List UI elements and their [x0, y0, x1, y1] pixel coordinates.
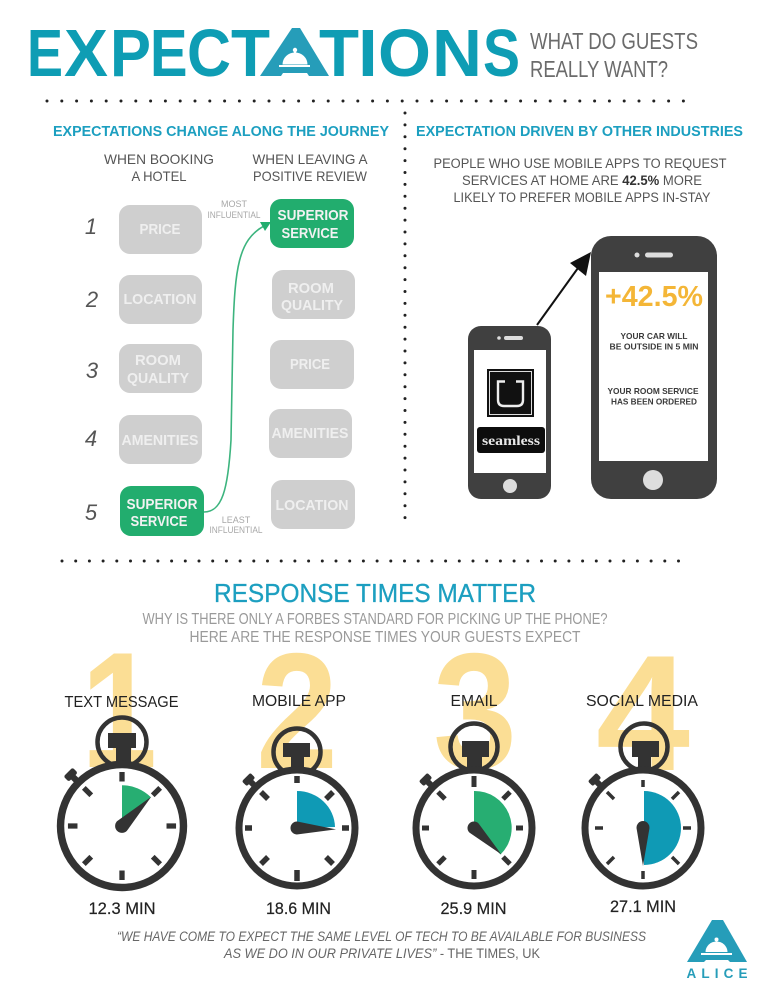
quote: “WE HAVE COME TO EXPECT THE SAME LEVEL OF TECH TO BE AVAILABLE FOR BUSINESS: [117, 929, 646, 944]
value: 12.3 min: 12.3 MIN: [88, 900, 156, 918]
right column: ranking boxes: SUPERIOR: [278, 207, 349, 224]
title: C: [187, 16, 231, 91]
left column: ranking boxes: ROOM: [135, 352, 181, 369]
title: E: [150, 16, 188, 91]
title: S: [483, 16, 520, 91]
label: least influential: LEAST: [222, 515, 251, 525]
icon: stopwatch face at 18.6 minutes: [239, 770, 355, 886]
panel: expectation driven by other industries: [416, 124, 743, 499]
panel: expectations change along the journey: [53, 124, 389, 536]
panel: email timer: [416, 693, 532, 918]
right column: ranking boxes: QUALITY: [281, 297, 343, 314]
text block: mobile apps statistic: PEOPLE WHO USE MOBILE APPS TO REQUEST: [434, 156, 726, 171]
label: least influential: [210, 515, 262, 535]
column heading: when leaving a review: POSITIVE REVIEW: [253, 168, 368, 184]
label: text message: TEXT MESSAGE: [64, 694, 178, 711]
label: email: EMAIL: [450, 693, 498, 710]
column heading: when booking: WHEN BOOKING: [104, 151, 214, 167]
icon: stopwatch face at 25.9 minutes: [416, 770, 532, 886]
right column: ranking boxes: PRICE: [290, 356, 330, 373]
large rank numerals: 4: [596, 621, 690, 805]
logo: alice: ALICE: [686, 966, 748, 981]
title: [27, 16, 520, 91]
icon: stopwatch crown: [450, 724, 498, 770]
text block: response times intro: [142, 611, 608, 646]
right column: ranking boxes: AMENITIES: [272, 425, 348, 442]
arrow: superior service rises: [204, 222, 271, 512]
column heading: when leaving a review: [252, 151, 368, 184]
text block: phone messages: YOUR ROOM SERVICE: [608, 386, 699, 396]
panel: social media timer: [585, 693, 701, 916]
text block: response times intro: HERE ARE THE RESPONSE TIMES YOUR GUESTS EXPECT: [190, 629, 581, 646]
rank numbers: 2: [85, 287, 98, 312]
right column: ranking boxes: ROOM: [288, 280, 334, 297]
subtitle: REALLY WANT?: [530, 56, 668, 82]
arrow: small phone to large phone: [537, 252, 591, 325]
rank numbers: 1: [85, 214, 97, 239]
right column: ranking boxes: [269, 199, 355, 529]
title: T: [231, 16, 270, 91]
title: O: [378, 16, 431, 91]
text block: mobile apps statistic: LIKELY TO PREFER MOBILE APPS IN-STAY: [454, 190, 710, 205]
value: 27.1 min: 27.1 MIN: [610, 898, 676, 916]
icon: large phone: [591, 236, 717, 499]
title: X: [64, 16, 108, 91]
icon: stopwatch face at 27.1 minutes: [585, 770, 701, 886]
left column: ranking boxes: QUALITY: [127, 370, 189, 387]
label: most influential: INFLUENTIAL: [208, 210, 260, 220]
left column: ranking boxes: SERVICE: [130, 513, 188, 530]
icon: stopwatch crown: [620, 724, 668, 770]
right column: ranking boxes: LOCATION: [276, 497, 348, 514]
left column: ranking boxes: [119, 205, 204, 536]
rank numbers: 5: [85, 500, 98, 525]
icon: stopwatch crown: [274, 728, 320, 776]
stat: plus 42.5 percent: +42.5%: [605, 281, 703, 313]
value: 25.9 min: 25.9 MIN: [440, 900, 506, 918]
value: 18.6 min: 18.6 MIN: [266, 900, 331, 918]
label: most influential: [208, 199, 260, 220]
heading: response times matter: RESPONSE TIMES MATTER: [214, 580, 536, 608]
text block: phone messages: [608, 331, 699, 406]
rank numbers: 4: [85, 426, 97, 451]
left column: ranking boxes: LOCATION: [124, 291, 196, 308]
title: P: [110, 16, 151, 91]
large rank numerals: 1: [81, 618, 157, 802]
right column: ranking boxes: SERVICE: [282, 225, 338, 242]
text block: phone messages: BE OUTSIDE IN 5 MIN: [610, 342, 698, 352]
heading: other industries: EXPECTATION DRIVEN BY OTHER INDUSTRIES: [416, 124, 743, 140]
text block: phone messages: HAS BEEN ORDERED: [611, 396, 697, 406]
quote: AS WE DO IN OUR PRIVATE LIVES” - THE TIMES, UK: [223, 946, 540, 961]
label: mobile app: MOBILE APP: [252, 693, 346, 710]
rank numbers: [85, 214, 99, 525]
heading: journey: EXPECTATIONS CHANGE ALONG THE JOURNEY: [53, 124, 389, 140]
text block: response times intro: WHY IS THERE ONLY A FORBES STANDARD FOR PICKING UP THE PHONE?: [142, 611, 608, 628]
large rank numerals: [81, 618, 690, 805]
title: T: [319, 16, 359, 91]
icon: stopwatch crown: [98, 718, 146, 766]
left column: ranking boxes: AMENITIES: [122, 432, 198, 449]
label: most influential: MOST: [221, 199, 248, 209]
text block: phone messages: YOUR CAR WILL: [620, 331, 688, 341]
title: E: [27, 16, 63, 91]
column heading: when booking: A HOTEL: [132, 168, 187, 184]
subtitle: [530, 28, 698, 82]
icon: stopwatch face at 12.3 minutes: [61, 765, 183, 887]
icon: seamless logo: seamless: [482, 434, 541, 449]
panel: text message timer: [61, 694, 183, 918]
large rank numerals: 3: [433, 619, 517, 803]
label: least influential: INFLUENTIAL: [210, 525, 262, 535]
logo: alice: [686, 920, 748, 981]
title: N: [432, 16, 482, 91]
text block: mobile apps statistic: [434, 156, 726, 205]
quote: [117, 929, 646, 961]
icon: small phone: [468, 326, 551, 499]
title: I: [358, 16, 378, 91]
text block: mobile apps statistic: SERVICES AT HOME ARE 42.5% MORE: [462, 173, 702, 188]
icon: seamless logo: [477, 427, 545, 453]
left column: ranking boxes: PRICE: [140, 221, 180, 238]
large rank numerals: 2: [256, 619, 338, 803]
column heading: when leaving a review: WHEN LEAVING A: [252, 151, 368, 167]
subtitle: WHAT DO GUESTS: [530, 28, 698, 54]
left column: ranking boxes: SUPERIOR: [126, 496, 198, 513]
column heading: when booking: [104, 151, 214, 184]
panel: mobile app timer: [239, 693, 355, 918]
label: social media: SOCIAL MEDIA: [586, 693, 698, 710]
icon: title letter A with bell: [260, 28, 329, 76]
icon: uber logo: [487, 369, 534, 417]
rank numbers: 3: [86, 358, 99, 383]
